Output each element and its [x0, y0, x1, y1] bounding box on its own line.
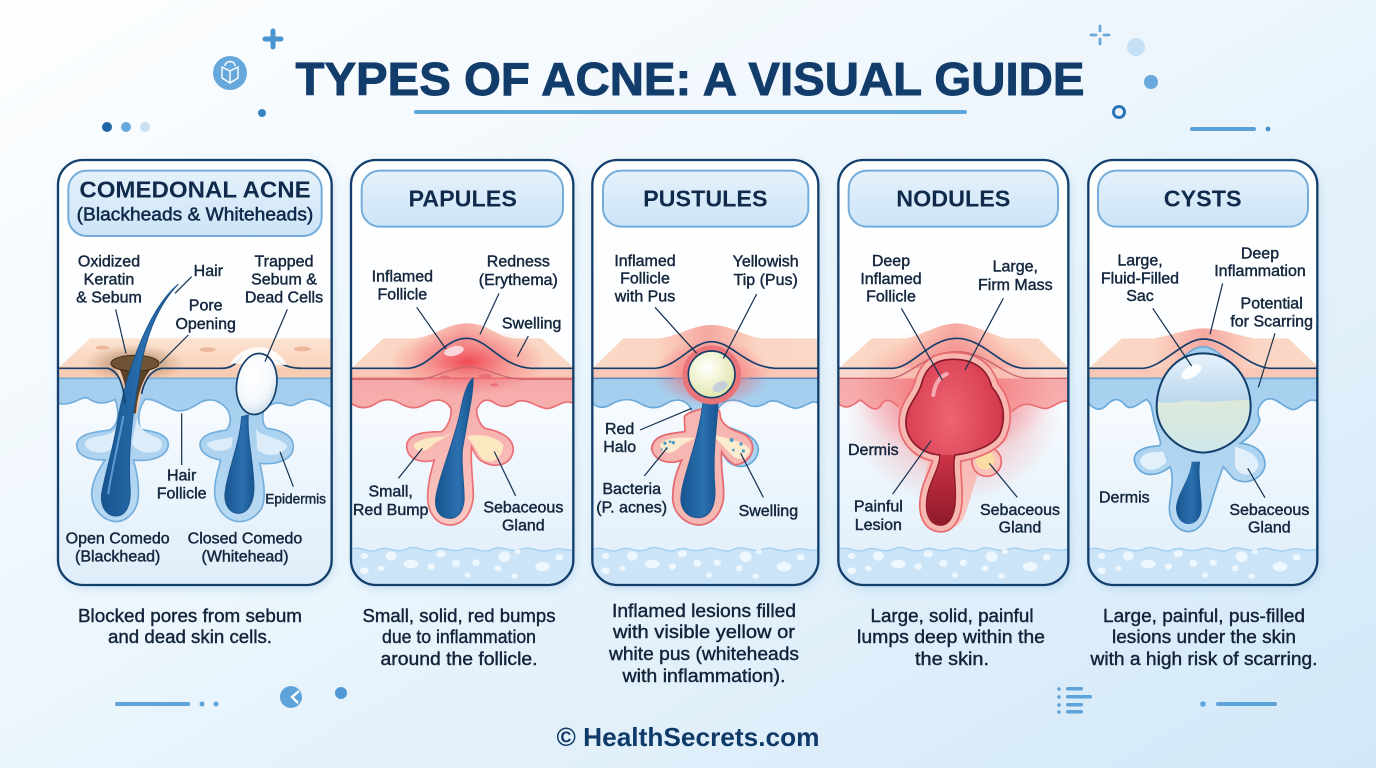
panel: papules — [351, 160, 591, 590]
label: yellowish tip: Yellowish — [733, 254, 799, 271]
label: sebaceous gland: Sebaceous — [483, 500, 563, 517]
decoration: bottom right line — [1200, 701, 1275, 707]
label: epidermis: Epidermis — [265, 491, 326, 506]
label: pore opening: Opening — [175, 316, 236, 333]
header pill — [603, 171, 808, 227]
panel border — [1088, 160, 1317, 585]
header pill — [1098, 171, 1308, 227]
caption: cysts: lesions under the skin — [1112, 627, 1296, 647]
skin cross-section: cyst — [1088, 328, 1328, 590]
caption: cysts: Large, painful, pus-filled — [1103, 606, 1305, 626]
label: dermis: Dermis — [848, 442, 899, 459]
label: trapped sebum and dead cells: Trapped — [255, 254, 313, 271]
caption: nodules: lumps deep within the — [857, 627, 1045, 647]
caption: comedonal — [78, 606, 302, 647]
label: open comedo: (Blackhead) — [75, 549, 160, 566]
label: bacteria: Bacteria — [602, 481, 661, 498]
label: sebaceous gland: Gland — [502, 518, 545, 535]
label: red halo: Halo — [603, 439, 636, 456]
label: oxidized keratin and sebum — [76, 254, 142, 353]
caption: pustules: with visible yellow or — [612, 622, 795, 642]
header pill: NODULES — [896, 186, 1010, 212]
skin cross-section: pustule — [592, 325, 832, 590]
label: sebaceous gland: Sebaceous — [1229, 502, 1309, 519]
label: large firm mass: Firm Mass — [978, 277, 1053, 294]
caption: pustules: Inflamed lesions filled — [612, 601, 796, 621]
caption: cysts — [1089, 606, 1318, 669]
label: redness: (Erythema) — [479, 272, 558, 289]
label: oxidized keratin and sebum: & Sebum — [76, 290, 142, 307]
label: sebaceous gland — [980, 463, 1060, 536]
label: swelling — [739, 453, 798, 520]
label: swelling: Swelling — [739, 503, 798, 520]
header pill: PUSTULES — [643, 186, 768, 212]
caption: comedonal: Blocked pores from sebum — [78, 606, 302, 626]
icon: box badge — [213, 56, 247, 90]
label: red halo: Red — [605, 421, 634, 438]
label: deep inflamed follicle — [860, 253, 942, 380]
panel: nodules — [838, 160, 1078, 590]
label: redness — [479, 254, 558, 334]
label: open comedo — [66, 530, 170, 566]
label: epidermis — [265, 452, 326, 506]
label: deep inflamed follicle: Deep — [872, 253, 910, 270]
label: hair — [175, 263, 224, 293]
caption: nodules — [857, 606, 1045, 669]
panel: cysts — [1088, 160, 1328, 590]
panels: nodules and cysts — [838, 160, 1328, 590]
label: sebaceous gland — [1229, 468, 1309, 536]
icon: list — [1057, 687, 1092, 714]
decorations: top right — [1091, 26, 1270, 131]
footer credit: © HealthSecrets.com — [556, 722, 820, 752]
decorations: top left — [102, 31, 281, 132]
panels: papules and pustules — [351, 160, 832, 590]
label: large firm mass — [965, 259, 1053, 370]
label: pore opening: Pore — [189, 298, 223, 315]
label: deep inflamed follicle: Follicle — [866, 289, 916, 306]
label: open comedo: Open Comedo — [66, 530, 170, 547]
label: oxidized keratin and sebum: Keratin — [84, 271, 134, 288]
label: small red bump: Small, — [368, 484, 413, 501]
label: potential for scarring — [1230, 295, 1313, 387]
label: painful lesion: Painful — [854, 499, 903, 516]
caption: papules: Small, solid, red bumps — [362, 606, 556, 626]
title: TYPES OF ACNE: A VISUAL GUIDE — [296, 53, 1084, 105]
panel border — [838, 160, 1068, 585]
header pill — [849, 171, 1058, 227]
skin cross-section: papule — [352, 323, 572, 584]
label: sebaceous gland: Gland — [999, 519, 1041, 536]
label: trapped sebum and dead cells: Dead Cells — [245, 290, 323, 307]
label: inflamed follicle with pus: Inflamed — [614, 253, 676, 270]
label: hair follicle: Follicle — [157, 485, 207, 502]
label: large fluid-filled sac: Sac — [1126, 288, 1154, 305]
header pill: PAPULES — [408, 186, 517, 212]
header pill — [68, 171, 322, 236]
label: oxidized keratin and sebum: Oxidized — [78, 254, 140, 271]
label: inflamed follicle: Follicle — [377, 286, 427, 303]
label: inflamed follicle — [372, 269, 446, 349]
label: inflamed follicle with pus: Follicle — [620, 270, 670, 287]
label: closed comedo — [188, 530, 302, 566]
label: dermis: Dermis — [1099, 490, 1150, 507]
label: deep inflamed follicle: Inflamed — [860, 271, 922, 288]
label: large firm mass: Large, — [993, 259, 1038, 276]
label: closed comedo: Closed Comedo — [188, 530, 302, 547]
label: large fluid-filled sac — [1101, 253, 1192, 366]
caption: pustules: with inflammation). — [621, 666, 786, 686]
skin cross-section: nodule — [838, 323, 1078, 590]
caption: papules: around the follicle. — [380, 649, 538, 669]
label: painful lesion — [854, 441, 931, 534]
label: bacteria — [596, 448, 667, 516]
label: large fluid-filled sac: Fluid-Filled — [1101, 270, 1179, 287]
header pill — [362, 171, 563, 227]
caption: pustules — [608, 601, 799, 686]
label: small red bump: Red Bump — [353, 502, 429, 519]
panel: comedonal acne — [58, 160, 333, 585]
label: inflamed follicle with pus: with Pus — [614, 289, 675, 306]
label: closed comedo: (Whitehead) — [201, 549, 289, 566]
label: trapped sebum and dead cells: Sebum & — [251, 271, 317, 288]
label: swelling: Swelling — [502, 315, 561, 332]
label: small red bump — [353, 448, 429, 519]
icon: pie — [280, 686, 302, 708]
label: trapped sebum and dead cells — [245, 254, 323, 362]
panel border — [351, 160, 573, 585]
label: hair follicle — [157, 413, 207, 502]
label: redness: Redness — [487, 254, 550, 271]
label: potential for scarring: for Scarring — [1230, 314, 1313, 331]
label: deep inflammation — [1210, 245, 1306, 334]
label: sebaceous gland — [483, 452, 563, 535]
header pill: CYSTS — [1164, 186, 1242, 212]
title underline — [414, 110, 967, 114]
label: deep inflammation: Inflammation — [1214, 263, 1306, 280]
label: yellowish tip: Tip (Pus) — [734, 272, 798, 289]
label: sebaceous gland: Gland — [1248, 519, 1291, 536]
label: hair: Hair — [194, 263, 224, 280]
header pill: (Blackheads & Whiteheads) — [77, 204, 313, 225]
label: pore opening — [160, 298, 236, 363]
panel border — [58, 160, 332, 585]
panel: pustules — [592, 160, 832, 590]
caption: nodules: the skin. — [915, 649, 989, 669]
label: bacteria: (P. acnes) — [596, 499, 667, 516]
label: sebaceous gland: Sebaceous — [980, 502, 1060, 519]
label: inflamed follicle: Inflamed — [372, 269, 433, 286]
label: large fluid-filled sac: Large, — [1117, 253, 1163, 270]
label: yellowish tip — [723, 254, 799, 358]
label: inflamed follicle with pus — [614, 253, 697, 353]
caption: nodules: Large, solid, painful — [870, 606, 1034, 626]
caption: cysts: with a high risk of scarring. — [1089, 649, 1318, 669]
caption: papules: due to inflammation — [382, 627, 536, 647]
label: painful lesion: Lesion — [855, 517, 902, 534]
caption: comedonal: and dead skin cells. — [108, 627, 272, 647]
caption: pustules: white pus (whiteheads — [608, 644, 799, 664]
header pill: COMEDONAL ACNE — [79, 177, 311, 203]
panel border — [592, 160, 818, 585]
label: hair follicle: Hair — [167, 468, 197, 485]
label: swelling — [502, 315, 561, 357]
skin cross-section: comedones — [58, 284, 333, 522]
label: red halo — [603, 408, 692, 456]
caption: papules — [362, 606, 556, 669]
label: potential for scarring: Potential — [1241, 295, 1303, 312]
decorations: bottom left — [117, 687, 347, 706]
label: deep inflammation: Deep — [1241, 245, 1279, 262]
